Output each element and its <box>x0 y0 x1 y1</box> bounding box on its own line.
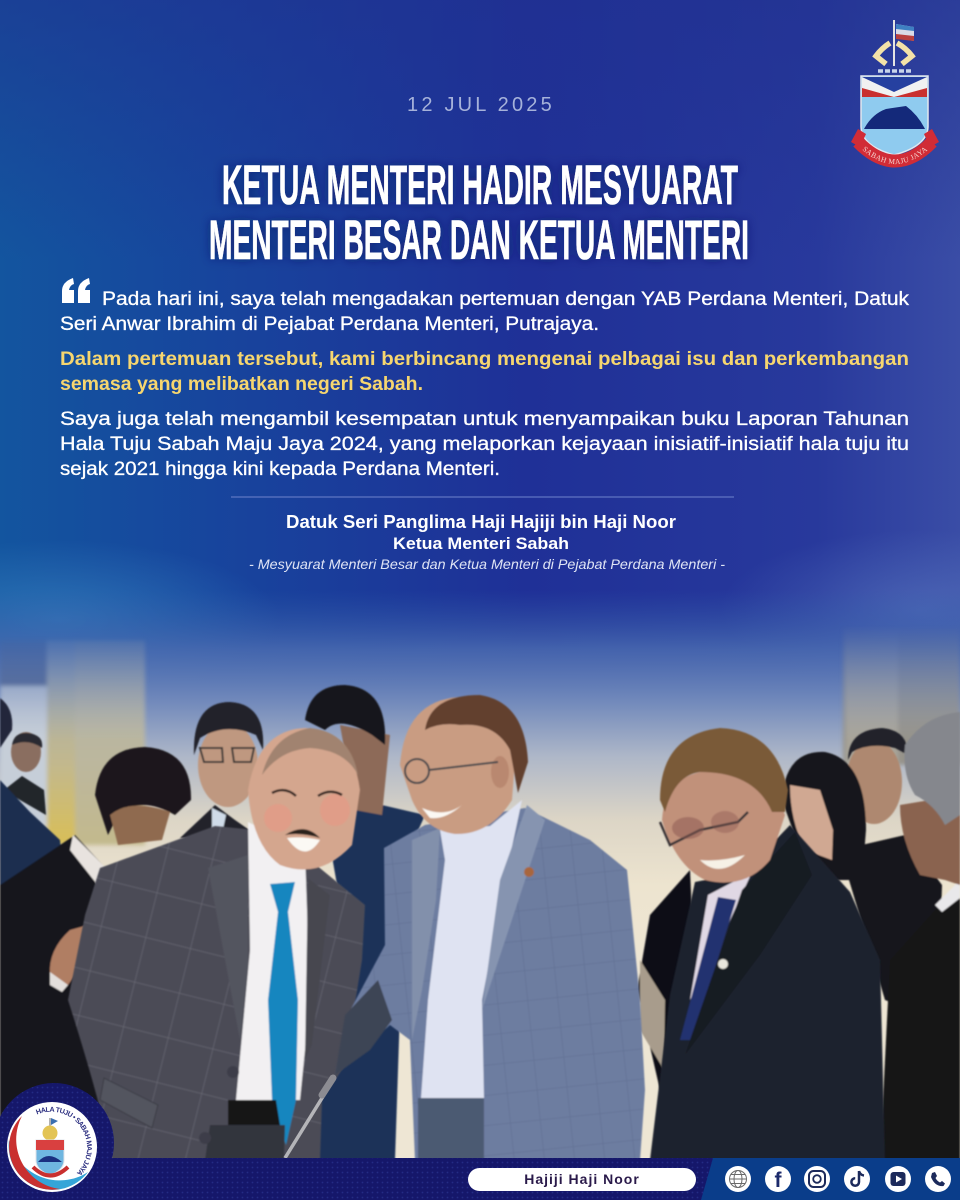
photo: man in dark suit with navy tie <box>650 728 885 1160</box>
paragraph 2: highlighted <box>60 349 909 395</box>
red swoosh <box>9 1116 60 1190</box>
white roundel <box>7 1102 97 1192</box>
paragraph 1: Pada hari ini, saya telah mengadakan pertemuan dengan YAB Perdana Menteri, Datuk <box>102 289 910 310</box>
blue swoosh <box>9 1140 88 1190</box>
footer dark band <box>0 1158 960 1200</box>
photo: room wall <box>0 590 960 1160</box>
mountain <box>864 106 925 129</box>
paragraph 3: Hala Tuju Sabah Maju Jaya 2024, yang melaporkan kejayaan inisiatif-inisiatif hala tuju itu <box>60 434 909 455</box>
emblem: Sabah coat of arms <box>851 20 939 168</box>
small shield <box>33 1140 68 1176</box>
paragraph 2: highlighted: semasa yang melibatkan negeri Sabah. <box>60 374 423 395</box>
title <box>209 153 749 271</box>
crown and small flag <box>42 1118 58 1140</box>
footer bar <box>0 1158 960 1200</box>
photo: man in blue plaid suit <box>335 695 645 1160</box>
speaker role: Ketua Menteri Sabah <box>393 534 569 553</box>
photo: microphone <box>285 1078 333 1158</box>
paragraph 3: sejak 2021 hingga kini kepada Perdana Menteri. <box>60 459 500 480</box>
photo: group of leaders smiling <box>0 590 960 1160</box>
photo: right curtains <box>843 625 960 765</box>
paragraph 1: Seri Anwar Ibrahim di Pejabat Perdana Menteri, Putrajaya. <box>60 314 599 335</box>
quote text block <box>60 278 910 480</box>
icon: quotation mark <box>62 278 90 303</box>
attribution <box>249 512 725 572</box>
paragraph 3: Saya juga telah mengambil kesempatan untuk menyampaikan buku Laporan Tahunan <box>60 409 909 430</box>
name pill: Hajiji Haji Noor <box>524 1171 640 1187</box>
motto: SABAH MAJU JAYA <box>862 146 928 164</box>
name pill <box>468 1168 696 1191</box>
icon: tiktok <box>844 1166 870 1192</box>
beads <box>878 69 912 73</box>
icon: phone <box>925 1166 951 1192</box>
photo: background people left <box>0 685 425 1160</box>
icon: website globe <box>725 1166 751 1192</box>
paragraph 1 <box>60 289 910 335</box>
dotted backing disc <box>0 1083 114 1200</box>
hands holding flag <box>876 43 912 64</box>
flag <box>894 20 914 66</box>
icon: instagram <box>804 1166 830 1192</box>
speaker name: Datuk Seri Panglima Haji Hajiji bin Haji Noor <box>286 512 676 532</box>
icon: facebook <box>765 1166 791 1192</box>
event caption: - Mesyuarat Menteri Besar dan Ketua Menteri di Pejabat Perdana Menteri - <box>249 556 725 572</box>
badge: Hala Tuju Sabah Maju Jaya <box>0 1083 114 1192</box>
ribbon <box>851 129 939 168</box>
shield <box>861 76 928 155</box>
paragraph 3 <box>60 409 909 480</box>
photo: left window and pillars <box>0 640 145 845</box>
icon: youtube <box>885 1166 911 1192</box>
badge circular text: HALA TUJU • SABAH MAJU JAYA <box>36 1106 92 1175</box>
photo: background people right <box>637 712 960 1160</box>
icon: facebook: f <box>774 1169 782 1192</box>
date: 12 JUL 2025 <box>407 94 555 116</box>
footer blue social section <box>701 1158 960 1200</box>
paragraph 2: highlighted: Dalam pertemuan tersebut, kami berbincang mengenai pelbagai isu dan perkembangan <box>60 349 909 370</box>
photo: man in grey plaid suit with blue tie <box>68 728 365 1160</box>
